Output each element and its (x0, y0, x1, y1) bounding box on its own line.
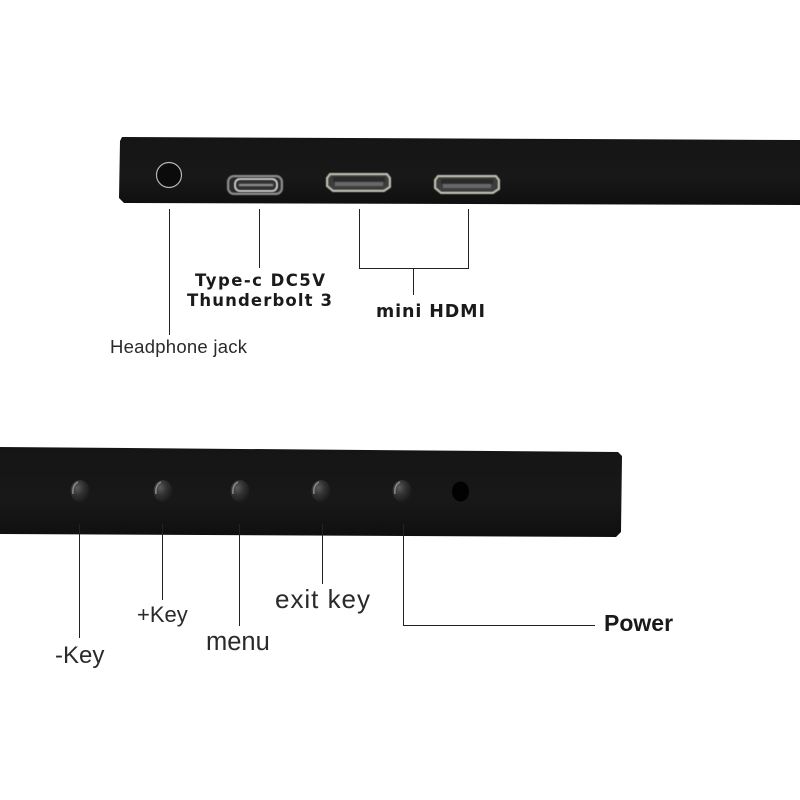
panel: top device edge with ports (119, 137, 800, 205)
icon: menu button (230, 480, 250, 502)
text: Type-c DC5V Thunderbolt 3: Type-c DC5V (195, 271, 325, 290)
icon: minus key button (70, 480, 90, 502)
arrow: mini HDMI bracket (360, 209, 468, 295)
arrow: headphone jack leader (168, 209, 170, 335)
icon: indicator hole (452, 482, 469, 502)
arrow: plus key leader (162, 524, 164, 600)
text: mini HDMI: mini HDMI (376, 302, 485, 322)
arrow: power leader (404, 524, 595, 626)
arrow: menu leader (238, 524, 240, 626)
icon: plus key button (154, 480, 172, 502)
icon: Type-C port (228, 176, 282, 194)
panel: bottom device edge with keys (0, 447, 622, 537)
text: menu: menu (206, 628, 270, 656)
text: Power: Power (604, 610, 673, 636)
icon: mini HDMI port 1 (327, 174, 390, 191)
text: Type-c DC5V Thunderbolt 3 (187, 271, 332, 310)
arrow: Type-C leader (258, 209, 260, 268)
text: -Key: -Key (55, 642, 104, 669)
arrow: minus key leader (78, 524, 80, 638)
icon: mini HDMI port 2 (435, 176, 499, 193)
icon: headphone jack (156, 162, 182, 188)
icon: power button (392, 480, 412, 502)
icon: exit key button (312, 480, 330, 502)
text: Type-c DC5V Thunderbolt 3: Thunderbolt 3 (187, 291, 332, 310)
text: Headphone jack: Headphone jack (110, 336, 248, 357)
text: +Key: +Key (137, 602, 188, 627)
text: exit key: exit key (275, 584, 370, 614)
arrow: exit key leader (322, 524, 324, 584)
